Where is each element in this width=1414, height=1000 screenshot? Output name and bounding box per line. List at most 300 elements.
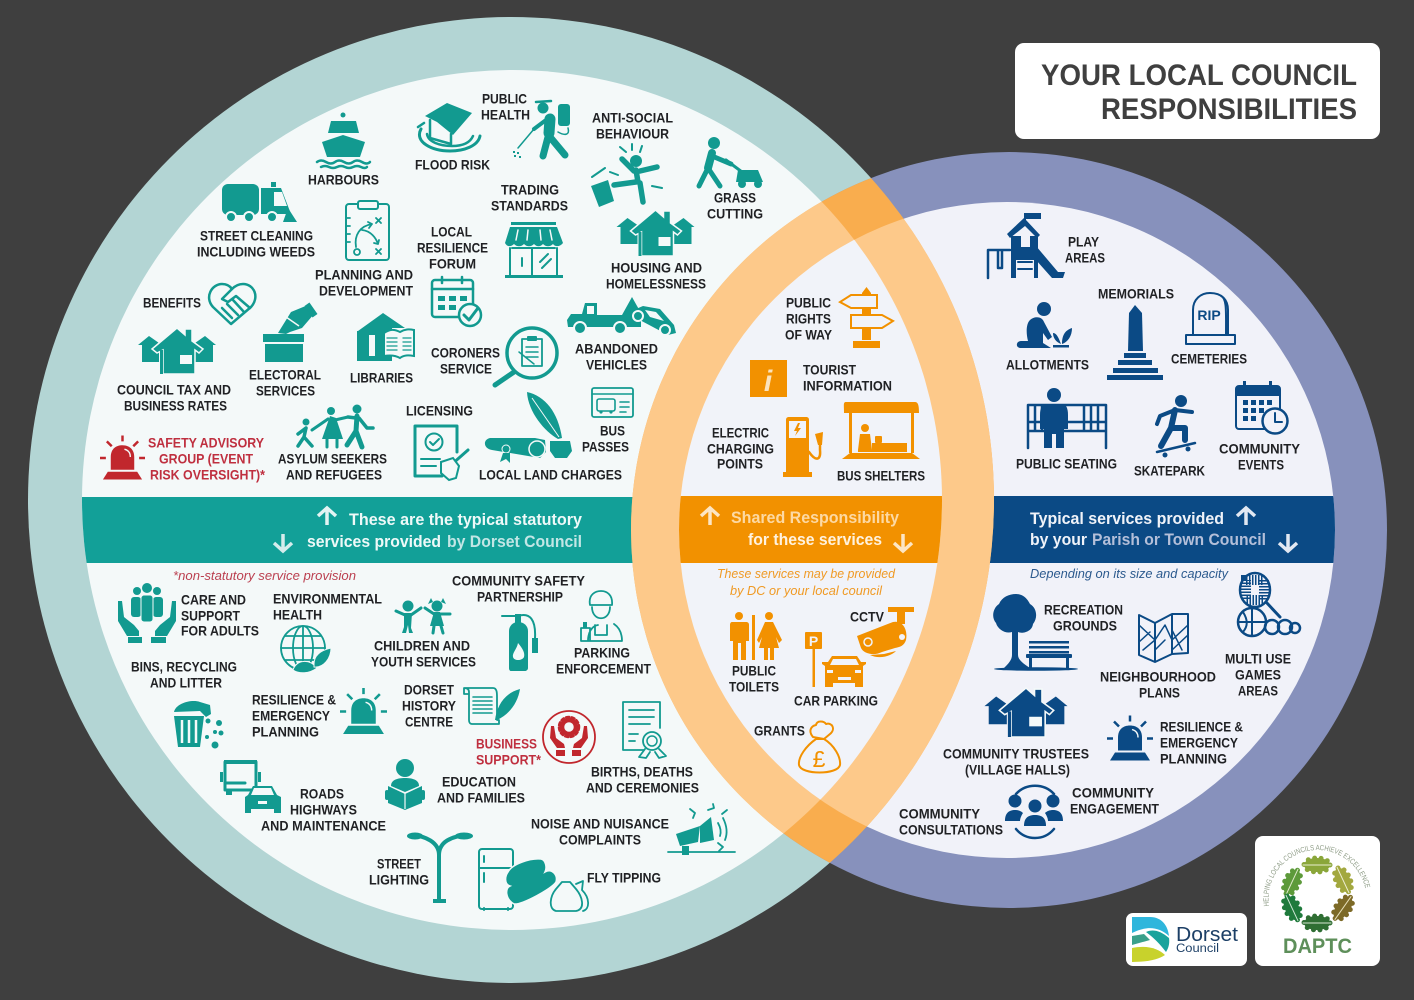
wordmark: DAPTC xyxy=(1283,935,1352,958)
service: recreation grounds xyxy=(993,594,1123,671)
label xyxy=(261,786,386,834)
label: FLY TIPPING xyxy=(587,870,661,886)
label: INFORMATION xyxy=(803,378,892,394)
icon: stamp document xyxy=(415,426,468,480)
icon: clipboard plan xyxy=(346,201,389,260)
icon: gravestone: RIP xyxy=(1197,307,1221,323)
label xyxy=(117,382,231,414)
label xyxy=(417,224,488,272)
icon: charging pump xyxy=(783,417,823,477)
label: COMMUNITY xyxy=(1219,441,1301,457)
label: POINTS xyxy=(717,456,763,472)
icon: tree and bench xyxy=(993,594,1078,671)
label xyxy=(1160,719,1243,767)
icon: vandal kicking bin xyxy=(591,144,662,207)
overlap band right side xyxy=(820,218,994,826)
label: PUBLIC xyxy=(732,663,776,679)
icon: signpost xyxy=(840,287,893,348)
icon: houses xyxy=(984,688,1068,737)
label: GROUP (EVENT xyxy=(159,451,253,467)
service: multi use games areas xyxy=(1225,573,1300,699)
service: trading standards xyxy=(491,182,568,278)
label: INCLUDING WEEDS xyxy=(197,244,315,260)
right circle: parish or town council xyxy=(631,152,1387,908)
arrow down xyxy=(1279,534,1297,551)
label: BIRTHS, DEATHS xyxy=(591,764,693,780)
icon: obelisk xyxy=(1107,305,1163,380)
label: AND LITTER xyxy=(150,675,222,691)
panel: shared services xyxy=(707,287,925,772)
banner: shared responsibility xyxy=(701,508,912,551)
label: STANDARDS xyxy=(491,198,568,214)
icon: shop xyxy=(505,222,563,278)
label: EVENTS xyxy=(1238,457,1284,473)
label: SUPPORT* xyxy=(476,752,541,768)
label xyxy=(252,692,336,740)
label: CAR PARKING xyxy=(794,693,878,709)
orange banner xyxy=(679,496,942,563)
service: community safety xyxy=(452,573,586,671)
icon: person on bench xyxy=(1028,388,1106,448)
label: COMMUNITY xyxy=(1072,785,1155,801)
icon: scroll, quill and ink xyxy=(485,392,572,463)
label xyxy=(575,341,658,373)
label: STREET CLEANING xyxy=(200,228,313,244)
label: YOUTH SERVICES xyxy=(371,654,476,670)
icon: overflowing bin xyxy=(174,701,224,748)
label xyxy=(729,663,779,695)
label: EDUCATION xyxy=(442,774,516,790)
left circle: Dorset Council xyxy=(28,17,994,983)
banner text: by your xyxy=(1030,530,1087,549)
icon: children xyxy=(396,598,450,633)
label xyxy=(476,736,541,768)
label xyxy=(402,682,457,730)
icon: people in a circle xyxy=(1005,786,1063,838)
overlap band left side xyxy=(631,202,854,834)
service: housing xyxy=(606,210,706,292)
icon: gardener xyxy=(1017,302,1072,348)
service: cctv xyxy=(850,607,914,657)
label: RIGHTS xyxy=(786,311,831,327)
label xyxy=(197,228,315,260)
arrow up xyxy=(318,508,336,525)
label: PUBLIC SEATING xyxy=(1016,456,1117,472)
label xyxy=(582,423,629,455)
service: history centre xyxy=(402,682,520,730)
label: CARE AND xyxy=(181,592,246,608)
label: ELECTRIC xyxy=(712,425,769,441)
label: AND REFUGEES xyxy=(286,467,382,483)
label: (VILLAGE HALLS) xyxy=(965,762,1070,778)
arrow down xyxy=(894,534,912,551)
banner text: services provided xyxy=(307,532,441,551)
service: play areas xyxy=(988,213,1105,278)
label: COUNCIL TAX AND xyxy=(117,382,231,398)
title: YOUR LOCAL COUNCIL xyxy=(1041,59,1357,92)
icon: info sign: i xyxy=(764,365,773,398)
banner text xyxy=(1030,509,1266,549)
service: coroners xyxy=(431,328,557,385)
label xyxy=(437,774,525,806)
icon: warden xyxy=(581,591,622,641)
label xyxy=(181,592,259,639)
logo wordmark: Council xyxy=(1176,943,1219,955)
icon: calendar check xyxy=(432,277,481,326)
label: CCTV xyxy=(850,609,885,625)
service: tourist information xyxy=(750,360,892,398)
icon: beacon xyxy=(340,688,387,734)
label: ENVIRONMENTAL xyxy=(273,591,382,607)
service: street cleaning xyxy=(197,182,315,260)
label: GROUNDS xyxy=(1053,618,1117,634)
label xyxy=(1225,651,1291,699)
panel: parish and town services xyxy=(899,213,1301,838)
label xyxy=(1219,441,1301,473)
service: roads xyxy=(220,760,386,834)
icon: scroll and quill xyxy=(464,688,520,724)
service: street lighting xyxy=(369,832,473,903)
label xyxy=(371,638,476,670)
label: HIGHWAYS xyxy=(290,802,357,818)
label: HEALTH xyxy=(481,107,530,123)
logo wordmark xyxy=(1176,924,1238,955)
label: CEMETERIES xyxy=(1171,351,1247,367)
icon: ship xyxy=(317,112,370,168)
label: COMPLAINTS xyxy=(559,832,641,848)
icon: street lamp xyxy=(407,832,473,903)
note: parish capacity: Depending on its size and capacity xyxy=(1030,566,1229,581)
label: FLOOD RISK xyxy=(415,157,490,173)
icon: houses xyxy=(616,210,694,256)
label: LIBRARIES xyxy=(350,370,413,386)
banner text xyxy=(731,508,900,549)
service: public rights of way xyxy=(785,287,893,348)
icon: bus and car xyxy=(220,760,281,813)
icon: hands holding people xyxy=(118,583,176,643)
label xyxy=(148,435,265,483)
label: LIGHTING xyxy=(369,872,429,888)
service: business support xyxy=(476,711,595,768)
note: shared services: by DC or your local council xyxy=(730,583,883,598)
title box xyxy=(1015,43,1380,139)
service: anti-social behaviour xyxy=(591,110,673,207)
banner text: Typical services provided xyxy=(1030,509,1224,528)
icon: toilet figures xyxy=(730,612,782,660)
label: RECREATION xyxy=(1044,602,1123,618)
label: RISK OVERSIGHT)* xyxy=(150,467,265,483)
logo: DAPTC xyxy=(1255,836,1380,966)
icon: tow truck xyxy=(567,297,676,335)
label: AND CEREMONIES xyxy=(586,780,699,796)
label: AREAS xyxy=(1065,250,1105,266)
service: memorials xyxy=(1098,286,1174,380)
icon: houses xyxy=(138,328,216,374)
service: allotments xyxy=(1006,302,1089,373)
service: harbours xyxy=(308,112,379,188)
icon: sprayer person xyxy=(513,101,570,158)
label xyxy=(1070,785,1159,817)
label xyxy=(131,659,237,691)
panel: statutory services upper xyxy=(100,91,763,483)
service: local resilience forum xyxy=(417,224,488,326)
banner text: Parish or Town Council xyxy=(1092,530,1266,549)
label: BEHAVIOUR xyxy=(596,126,669,142)
label xyxy=(707,190,763,222)
icon: street sweeper xyxy=(222,182,297,222)
service: community consultations: CONSULTATIONS xyxy=(899,822,1003,838)
service: environmental health xyxy=(273,591,382,673)
service: village halls xyxy=(943,688,1089,778)
service: births deaths xyxy=(586,702,699,796)
label: PLANNING xyxy=(1160,751,1227,767)
note: shared services xyxy=(717,566,896,598)
icon: calendar and clock xyxy=(1236,381,1288,434)
label: AND MAINTENANCE xyxy=(261,818,386,834)
icon: gear in hands xyxy=(543,711,595,763)
label: HARBOURS xyxy=(308,172,379,188)
service: grass cutting xyxy=(699,137,763,222)
label: FORUM xyxy=(429,256,476,272)
label xyxy=(481,91,530,123)
service: noise xyxy=(531,804,735,855)
icon: info sign xyxy=(750,360,787,398)
label: SUPPORT xyxy=(181,608,240,624)
label: BUSINESS xyxy=(476,736,537,752)
label xyxy=(606,260,706,292)
label xyxy=(803,362,892,394)
label: MEMORIALS xyxy=(1098,286,1174,302)
service: council tax xyxy=(117,328,231,414)
service: safety advisory group xyxy=(100,435,265,483)
label: LOCAL xyxy=(431,224,472,240)
icon: beacon xyxy=(1107,716,1153,760)
icon: skateboarder xyxy=(1157,395,1195,458)
service: benefits xyxy=(143,284,255,324)
overlap of rings xyxy=(631,178,994,863)
icon: fridge, sofa and bags xyxy=(479,849,588,911)
title xyxy=(1041,59,1357,126)
arrow down xyxy=(274,534,292,551)
label xyxy=(1065,234,1105,266)
service: bus shelters xyxy=(837,402,925,484)
label: PLAY xyxy=(1068,234,1100,250)
icon: fire extinguisher xyxy=(502,614,538,671)
label: CHILDREN AND xyxy=(374,638,470,654)
icon: family walking xyxy=(298,404,373,447)
logo: Dorset Council xyxy=(1126,913,1247,966)
label: AREAS xyxy=(1238,683,1278,699)
label: PLANS xyxy=(1139,685,1180,701)
left inner panel xyxy=(82,70,942,930)
label: GRANTS xyxy=(754,723,805,739)
label: CHARGING xyxy=(707,441,774,457)
icon: red beacon xyxy=(100,436,145,480)
label: BUSINESS RATES xyxy=(124,398,227,414)
label: PASSES xyxy=(582,439,629,455)
label xyxy=(785,295,833,343)
label: DORSET xyxy=(404,682,454,698)
label: OF WAY xyxy=(785,327,833,343)
label: AND FAMILIES xyxy=(437,790,525,806)
label: PARKING xyxy=(574,645,630,661)
label xyxy=(369,856,429,888)
service: resilience xyxy=(252,688,387,740)
label xyxy=(315,267,413,299)
icon: flooded house xyxy=(418,103,480,151)
label: COMMUNITY SAFETY xyxy=(452,573,586,589)
banner text: for these services xyxy=(748,530,882,549)
icon: bus pass card xyxy=(592,388,633,417)
label: NOISE AND NUISANCE xyxy=(531,816,669,832)
service: libraries xyxy=(350,313,414,386)
label: STREET xyxy=(377,856,421,872)
label: TRADING xyxy=(501,182,559,198)
icon: money bag: £ xyxy=(813,746,826,772)
icon: sports equipment xyxy=(1238,573,1300,636)
label: PUBLIC xyxy=(482,91,527,107)
label: TOURIST xyxy=(803,362,856,378)
icon: certificate xyxy=(623,702,666,758)
label xyxy=(452,573,586,605)
label: LOCAL LAND CHARGES xyxy=(479,467,622,483)
label: EMERGENCY xyxy=(1160,735,1239,751)
note: non-statutory: *non-statutory service provision xyxy=(173,568,356,583)
service: community events xyxy=(1219,381,1301,473)
label: HISTORY xyxy=(402,698,457,714)
banner text: Shared Responsibility xyxy=(731,508,900,527)
service: education xyxy=(385,759,525,810)
label: HEALTH xyxy=(273,607,322,623)
service: bus passes xyxy=(582,388,633,455)
label: ROADS xyxy=(300,786,344,802)
label: CENTRE xyxy=(405,714,453,730)
service: care and support xyxy=(118,583,259,643)
logo wordmark: Dorset xyxy=(1176,924,1238,946)
label: LICENSING xyxy=(406,403,473,419)
service: public toilets xyxy=(729,612,782,695)
service: electric charging xyxy=(707,417,823,477)
service: licensing xyxy=(406,403,473,480)
title: RESPONSIBILITIES xyxy=(1101,93,1357,126)
label xyxy=(431,345,500,377)
icon: reader xyxy=(385,759,425,810)
oak leaf ring xyxy=(1280,858,1357,930)
label: ELECTORAL xyxy=(249,367,321,383)
panel: statutory services lower xyxy=(118,573,735,911)
navy banner xyxy=(990,496,1335,563)
service: asylum seekers xyxy=(278,404,387,483)
label: SAFETY ADVISORY xyxy=(148,435,265,451)
service: abandoned vehicles xyxy=(567,297,676,373)
icon: ballot box xyxy=(263,303,317,362)
label: BENEFITS xyxy=(143,295,201,311)
service: cemeteries xyxy=(1171,293,1247,367)
label xyxy=(273,591,382,623)
label xyxy=(556,645,651,677)
service: flood risk xyxy=(415,103,490,173)
label: NEIGHBOURHOOD xyxy=(1100,669,1216,685)
service: skatepark xyxy=(1134,395,1205,479)
label: PARTNERSHIP xyxy=(477,589,563,605)
banner text: by Dorset Council xyxy=(447,532,582,551)
label xyxy=(586,764,699,796)
service: parking enforcement xyxy=(556,591,651,677)
service: public seating xyxy=(1016,388,1117,472)
right inner panel xyxy=(679,202,1335,858)
motto: HELPING LOCAL COUNCILS ACHIEVE EXCELLENCE xyxy=(1263,844,1370,906)
shared lens panel xyxy=(679,240,942,800)
label: ASYLUM SEEKERS xyxy=(278,451,387,467)
service: community engagement xyxy=(1005,785,1159,838)
teal banner xyxy=(60,497,660,563)
label: SERVICES xyxy=(256,383,315,399)
icon: library building and book xyxy=(357,313,414,361)
label: PLANNING xyxy=(252,724,319,740)
label: COMMUNITY TRUSTEES xyxy=(943,746,1089,762)
label xyxy=(707,425,774,472)
label: DEVELOPMENT xyxy=(319,283,413,299)
label xyxy=(491,182,568,214)
icon: globe with leaves xyxy=(281,626,331,673)
label xyxy=(1044,602,1123,634)
label: SERVICE xyxy=(440,361,492,377)
banner text xyxy=(307,510,583,551)
label xyxy=(943,746,1089,778)
label: ENFORCEMENT xyxy=(556,661,651,677)
arrow up xyxy=(1237,508,1255,525)
label: BINS, RECYCLING xyxy=(131,659,237,675)
service: grants xyxy=(754,722,840,772)
label: VEHICLES xyxy=(586,357,647,373)
service: bins xyxy=(131,659,237,748)
label xyxy=(1100,669,1216,701)
banner: statutory services xyxy=(274,508,583,551)
label xyxy=(249,367,321,399)
service: fly tipping xyxy=(479,849,661,911)
icon: megaphone xyxy=(668,804,735,855)
label: GRASS xyxy=(714,190,756,206)
label: ANTI-SOCIAL xyxy=(592,110,673,126)
label: BUS xyxy=(600,423,625,439)
label: CUTTING xyxy=(707,206,763,222)
service: car parking xyxy=(794,632,878,709)
label: PLANNING AND xyxy=(315,267,413,283)
label: ALLOTMENTS xyxy=(1006,357,1089,373)
service: children xyxy=(371,598,476,670)
service: electoral xyxy=(249,303,321,399)
icon: bus shelter xyxy=(842,402,920,459)
label: PUBLIC xyxy=(786,295,831,311)
service: community consultations: COMMUNITY xyxy=(899,806,981,822)
icon: folded map xyxy=(1139,614,1188,662)
service: local land charges xyxy=(479,392,622,483)
icon: magnifier clipboard xyxy=(495,328,557,385)
label: FOR ADULTS xyxy=(181,623,259,639)
label: RESILIENCE & xyxy=(252,692,336,708)
icon: lawn mower xyxy=(699,137,763,188)
service: community consultations xyxy=(899,806,1003,838)
logo mark xyxy=(1132,917,1169,962)
label xyxy=(531,816,669,848)
banner: parish services xyxy=(1030,508,1297,551)
service: resilience xyxy=(1107,716,1243,767)
icon: parking sign and car: P xyxy=(809,633,818,649)
label: MULTI USE xyxy=(1225,651,1291,667)
label: CORONERS xyxy=(431,345,500,361)
note: shared services: These services may be provided xyxy=(717,566,896,581)
label: ABANDONED xyxy=(575,341,658,357)
